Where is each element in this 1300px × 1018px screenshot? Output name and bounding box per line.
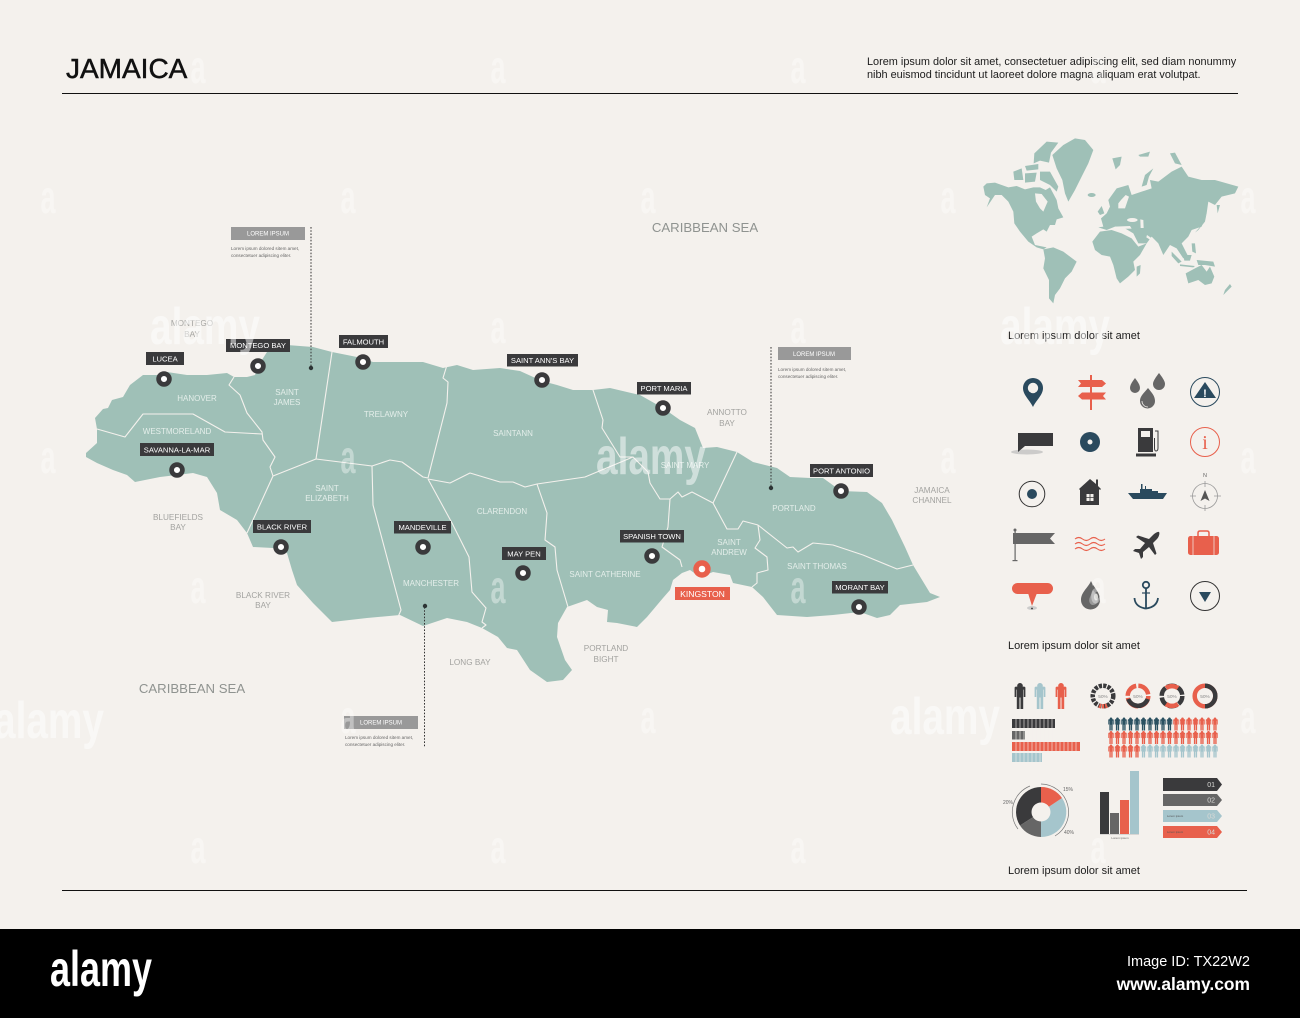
callout: south: [344, 604, 427, 747]
caption: charts: Lorem ipsum dolor sit amet: [1008, 865, 1140, 877]
watermarks: a: [640, 171, 656, 223]
arrow list: 04: [1207, 830, 1215, 836]
water labels: BAY: [170, 523, 186, 532]
footer url: www.alamy.com: [1116, 974, 1250, 994]
callout: north west: LOREM IPSUM: [247, 232, 289, 238]
water labels: MONTEGO: [171, 319, 213, 328]
parish names: HANOVER: [177, 394, 217, 403]
icon: signpost: [1078, 375, 1106, 410]
callout: north east: Lorem ipsum dolored sitem amet,: [778, 367, 846, 372]
water labels: ANNOTTO: [707, 408, 747, 417]
water labels: [153, 319, 952, 667]
parish names: SAINT MARY: [661, 461, 710, 470]
icon: compass: [1190, 473, 1221, 511]
arrow list: 01: [1207, 782, 1215, 789]
callout: north west: consectetuer adipiscing eliter.: [231, 253, 291, 258]
donut labels: [1098, 694, 1211, 700]
callout: north east: [769, 347, 851, 490]
city labels: PORT MARIA: [641, 384, 688, 393]
sea label north: CARIBBEAN SEA: [652, 220, 758, 235]
watermarks: [0, 41, 1256, 873]
footer image id: Image ID: TX22W2: [1127, 954, 1250, 970]
caption: icons: Lorem ipsum dolor sit amet: [1008, 640, 1140, 652]
bar chart: [1100, 771, 1139, 840]
water labels: BIGHT: [593, 655, 619, 664]
segmented bars: [1012, 719, 1080, 762]
footer bar: [0, 929, 1300, 1018]
water labels: BAY: [719, 419, 735, 428]
city labels: KINGSTON: [680, 589, 725, 599]
city labels: [140, 335, 888, 600]
callout: south: Lorem ipsum dolored sitem amet,: [345, 735, 413, 740]
icon: compass: N: [1203, 473, 1207, 479]
donut labels: 50%: [1200, 694, 1211, 700]
icon: warning: [1190, 378, 1220, 406]
water labels: JAMAICA: [914, 486, 950, 495]
watermarks: a: [40, 431, 56, 483]
icon: red map pin: [1012, 583, 1053, 610]
header description: nibh euismod tincidunt ut laoreet dolore magna aliquam erat volutpat.: [867, 69, 1201, 81]
watermarks: a: [490, 561, 506, 613]
watermarks: a: [1090, 41, 1106, 93]
callout: south: consectetuer adipiscing eliter.: [345, 742, 405, 747]
icon: anchor: [1134, 582, 1158, 608]
icon: info: [1190, 428, 1220, 456]
icon: water drops: [1130, 373, 1165, 409]
watermarks: a: [940, 431, 956, 483]
parish names: SAINT: [275, 388, 299, 397]
watermarks: a: [190, 821, 206, 873]
city labels: PORT ANTONIO: [813, 466, 870, 476]
parish names: SAINT THOMAS: [787, 562, 847, 571]
city labels: MONTEGO BAY: [230, 341, 286, 350]
people icons: [1015, 683, 1066, 709]
pie chart: 15%: [1063, 787, 1074, 793]
arrow list: 03: [1207, 814, 1215, 820]
arrow list: Lorem ipsum: [1167, 814, 1184, 818]
icon: fuel pump: [1136, 428, 1158, 456]
watermarks: a: [490, 301, 506, 353]
city labels: SAVANNA-LA-MAR: [144, 446, 211, 454]
watermarks: a: [1240, 171, 1256, 223]
callout: north west: [231, 227, 313, 370]
water labels: CHANNEL: [912, 496, 952, 505]
watermarks: a: [490, 41, 506, 93]
watermarks: alamy: [596, 428, 706, 486]
people grid: [1108, 718, 1218, 758]
parish names: SAINT CATHERINE: [569, 570, 641, 579]
parish names: PORTLAND: [772, 504, 816, 513]
watermarks: a: [1240, 431, 1256, 483]
arrow list: [1163, 778, 1222, 838]
pie chart: 20%: [1003, 800, 1014, 806]
icon: speech bubble: [1011, 433, 1053, 454]
parish names: SAINT: [717, 538, 741, 547]
watermarks: a: [1090, 821, 1106, 873]
icon: target: [1019, 481, 1045, 507]
watermarks: a: [340, 691, 356, 743]
parish borders: [97, 352, 913, 628]
parish names: JAMES: [274, 398, 300, 407]
sea label south: CARIBBEAN SEA: [139, 681, 245, 696]
icon: disc: [1080, 432, 1100, 452]
water labels: BAY: [184, 330, 200, 339]
donut labels: 50%: [1167, 694, 1178, 700]
icon: house: [1079, 479, 1101, 505]
watermarks: a: [790, 821, 806, 873]
watermarks: alamy: [150, 298, 260, 356]
watermarks: a: [1090, 561, 1106, 613]
icon: down arrow circle: [1190, 582, 1220, 610]
island outline: [86, 345, 940, 682]
city labels: LUCEA: [152, 354, 179, 364]
watermarks: a: [190, 561, 206, 613]
water labels: PORTLAND: [584, 644, 628, 653]
arrow list: Lorem ipsum: [1167, 830, 1184, 834]
watermarks: alamy: [1000, 298, 1110, 356]
icon: plane: [1133, 532, 1159, 559]
watermarks: a: [40, 171, 56, 223]
water labels: BAY: [255, 601, 271, 610]
city labels: SPANISH TOWN: [623, 532, 681, 541]
pie chart: [1003, 784, 1075, 837]
city labels: MORANT BAY: [835, 583, 885, 592]
header description: Lorem ipsum dolor sit amet, consectetuer adipiscing elit, sed diam nonummy: [867, 56, 1237, 68]
icon: info: i: [1202, 432, 1208, 454]
watermarks: a: [790, 301, 806, 353]
bar chart: Lorem ipsum: [1111, 836, 1129, 840]
watermarks: a: [640, 691, 656, 743]
world map: [983, 138, 1238, 303]
footer logo: alamy: [50, 941, 152, 997]
water labels: BLUEFIELDS: [153, 513, 204, 522]
icon: flag: [1012, 528, 1055, 561]
donut charts: [1093, 686, 1215, 706]
watermarks: a: [940, 171, 956, 223]
watermarks: a: [790, 41, 806, 93]
water labels: BLACK RIVER: [236, 591, 290, 600]
parish names: WESTMORELAND: [143, 427, 211, 436]
icon: warning: !: [1203, 388, 1207, 400]
water labels: LONG BAY: [449, 658, 491, 667]
callout: north west: Lorem ipsum dolored sitem amet,: [231, 246, 299, 251]
pie chart: 40%: [1064, 830, 1075, 836]
icon: waves: [1075, 538, 1105, 550]
callout: north east: consectetuer adipiscing eliter.: [778, 374, 838, 379]
icon: location pin: [1023, 378, 1043, 407]
parish names: SAINT: [315, 484, 339, 493]
city labels: BLACK RIVER: [257, 522, 308, 532]
icon: ship: [1128, 484, 1167, 499]
watermarks: a: [1240, 691, 1256, 743]
callout: south: LOREM IPSUM: [360, 720, 402, 726]
parish names: ANDREW: [711, 548, 747, 557]
watermarks: a: [340, 171, 356, 223]
icon: oil drop: [1081, 581, 1100, 610]
city labels: SAINT ANN'S BAY: [511, 356, 574, 365]
parish names: ELIZABETH: [305, 494, 349, 503]
parish names: MANCHESTER: [403, 579, 459, 588]
parish names: TRELAWNY: [364, 410, 409, 419]
city labels: MAY PEN: [507, 550, 541, 558]
city labels: MANDEVILLE: [398, 523, 447, 532]
donut labels: 50%: [1133, 694, 1144, 700]
donut labels: 50%: [1098, 694, 1109, 700]
parish names: SAINTANN: [493, 429, 533, 438]
title: JAMAICA: [66, 53, 188, 84]
watermarks: a: [340, 431, 356, 483]
arrow list: 02: [1207, 798, 1215, 804]
caption: world map: Lorem ipsum dolor sit amet: [1008, 330, 1140, 342]
parish names: [143, 388, 847, 588]
icon: suitcase: [1188, 531, 1219, 555]
callout: north east: LOREM IPSUM: [793, 352, 835, 358]
city labels: FALMOUTH: [343, 338, 384, 346]
watermarks: a: [490, 821, 506, 873]
watermarks: a: [790, 561, 806, 613]
watermarks: alamy: [890, 688, 1000, 746]
watermarks: a: [190, 41, 206, 93]
map of Jamaica: [86, 345, 940, 682]
city pins: [159, 357, 864, 612]
parish names: CLARENDON: [477, 507, 527, 516]
